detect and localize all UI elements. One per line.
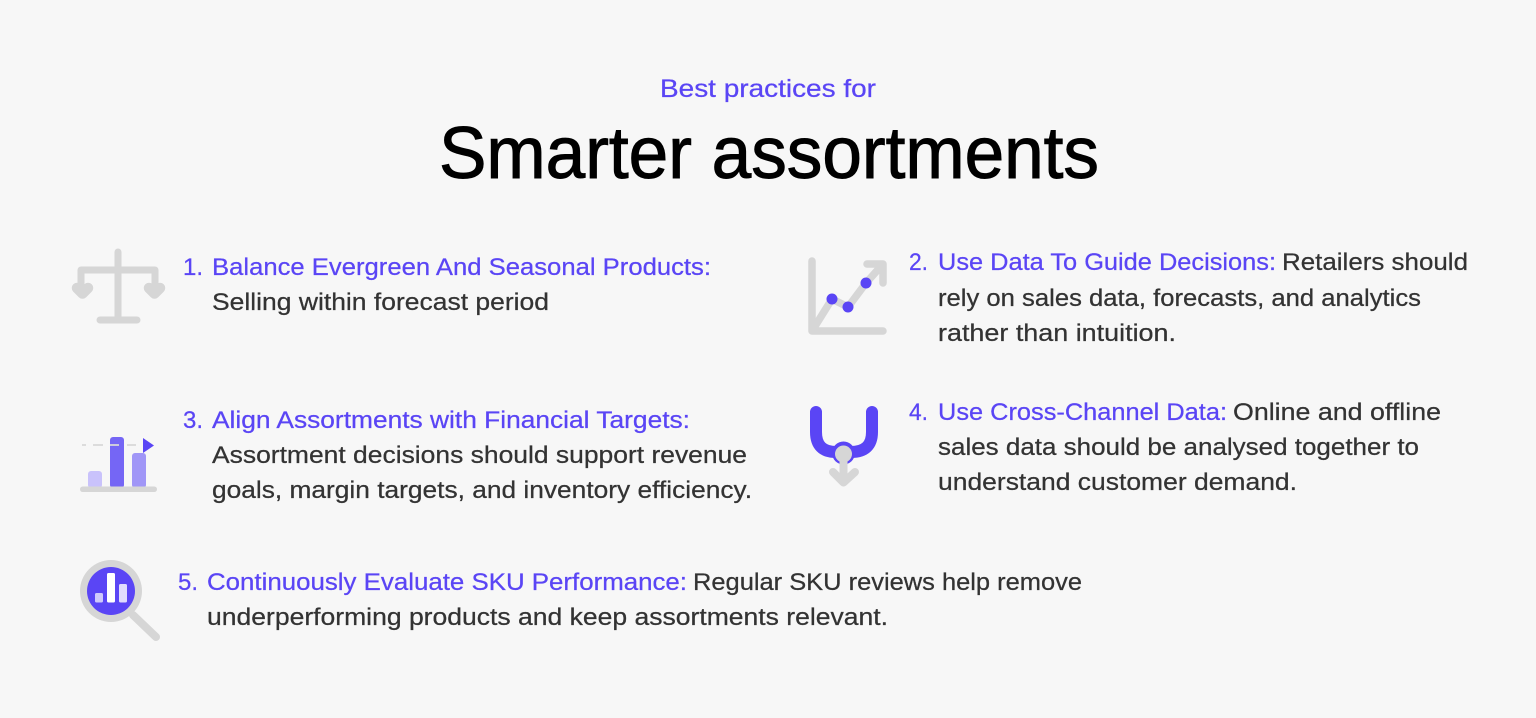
text: practice 2: rather than intuition. (938, 320, 1176, 347)
text: practice 3: Assortment decisions should support revenue (212, 442, 747, 469)
text: practice 5: underperforming products and keep assortments relevant. (207, 604, 888, 631)
text: practice 5 (178, 569, 1082, 631)
panel: practice 2 (812, 249, 1468, 347)
panel: practice 3 (80, 407, 752, 504)
text: practice 4 (909, 399, 1441, 496)
text: practice 2: 2. (909, 249, 928, 276)
text: practice 3: goals, margin targets, and inventory efficiency. (212, 477, 752, 504)
text: practice 4: 4. (909, 399, 928, 426)
panel: practice 5 (80, 560, 1082, 637)
text: practice 2: Use Data To Guide Decisions: (938, 249, 1276, 276)
icon: balance scale (77, 252, 160, 320)
text: practice 1: Balance Evergreen And Seasonal Products: (212, 254, 711, 281)
text: practice 4: Use Cross-Channel Data: (938, 399, 1227, 426)
text: practice 1: 1. (183, 254, 203, 281)
text: practice 2: rely on sales data, forecasts, and analytics (938, 285, 1421, 312)
text: practice 2: Retailers should (1282, 249, 1468, 276)
text: practice 5: Regular SKU reviews help remove (693, 569, 1082, 596)
icon: magnifying glass over bars (80, 560, 156, 637)
text: practice 3: 3. (183, 407, 203, 434)
icon: rising line chart (812, 261, 883, 331)
text: practice 1 (183, 254, 711, 316)
text: practice 1: Selling within forecast period (212, 289, 549, 316)
text: practice 2 (909, 249, 1468, 347)
text: practice 5: Continuously Evaluate SKU Performance: (207, 569, 687, 596)
panel: practice 4 (816, 399, 1441, 496)
title: Smarter assortments (439, 113, 1099, 194)
text: practice 4: sales data should be analysed together to (938, 434, 1419, 461)
text: practice 5: 5. (178, 569, 198, 596)
text: practice 4: understand customer demand. (938, 469, 1297, 496)
text: practice 3: Align Assortments with Financial Targets: (212, 407, 690, 434)
text: practice 3 (183, 407, 752, 504)
icon: bars with target flag (80, 437, 157, 492)
panel: practice 1 (77, 252, 711, 320)
eyebrow heading: Best practices for (660, 75, 876, 103)
icon: channels merging into funnel (816, 412, 872, 482)
text: practice 4: Online and offline (1233, 399, 1441, 426)
